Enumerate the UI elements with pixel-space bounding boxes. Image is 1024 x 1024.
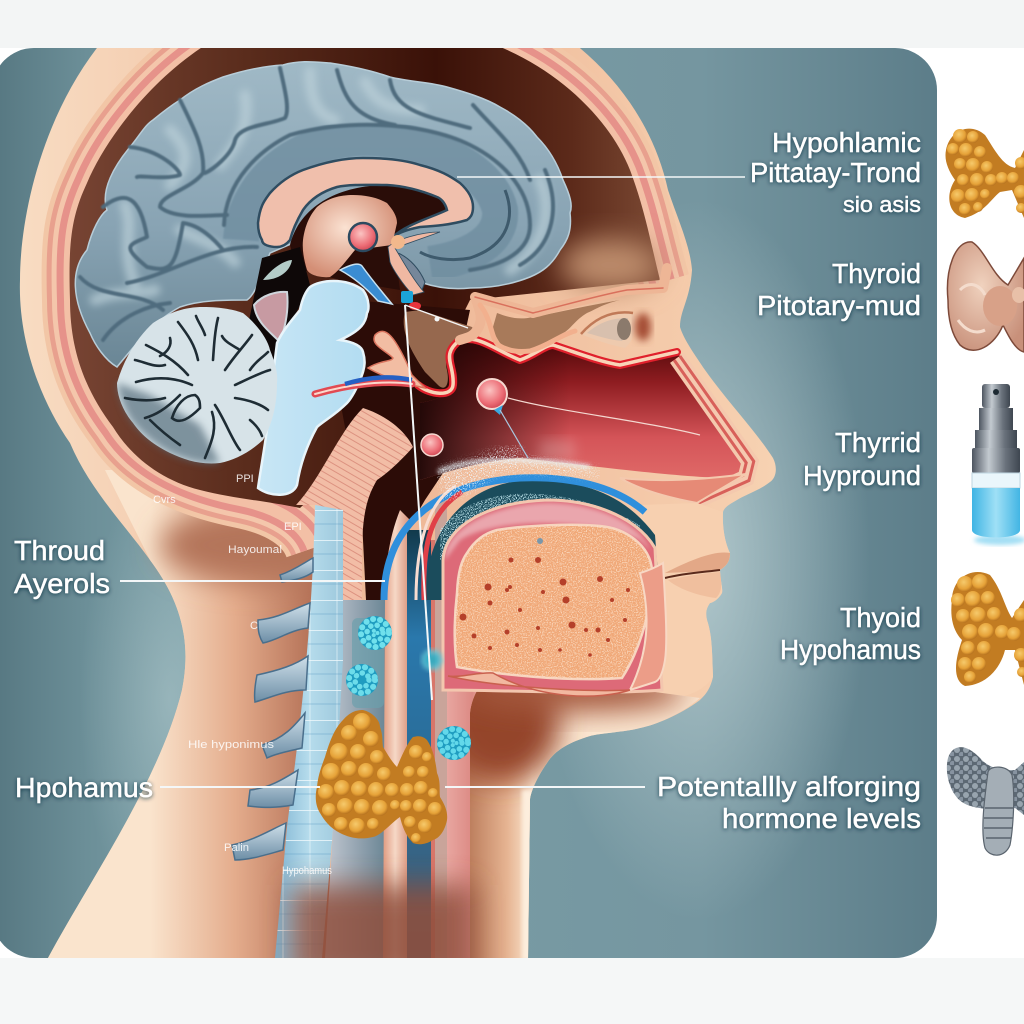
neck micro labels: C — [250, 620, 258, 632]
neck micro labels: Palin — [224, 842, 249, 854]
blue channel — [407, 530, 431, 960]
jaw and tongue assembly — [384, 478, 666, 696]
thyroid gland — [316, 710, 447, 844]
cerebellum lower shading — [117, 383, 220, 464]
label: thyroid pituitary — [757, 258, 921, 321]
blue tip under marker — [494, 405, 503, 415]
label: throud ayerols: Ayerols — [14, 568, 110, 599]
lavender band — [325, 600, 385, 958]
callosal rim — [420, 190, 509, 260]
icon: nasal spray bottle — [972, 384, 1024, 545]
icon: orange thyroid two — [951, 572, 1024, 686]
black gap beside brainstem — [245, 247, 310, 395]
pale throat tube — [383, 510, 410, 958]
neck micro labels: Hayoumal — [228, 544, 282, 556]
brain mass — [75, 62, 571, 367]
mist speckle — [437, 445, 600, 500]
tongue — [455, 525, 652, 679]
jaw lower band — [448, 673, 630, 696]
arbor vitae lines — [125, 316, 270, 458]
pituitary red marker — [409, 302, 421, 310]
hormone particle 4 — [437, 726, 471, 760]
highlight in cavity — [560, 239, 660, 291]
label: thyoid hypohamus — [780, 602, 921, 665]
jaw pink band — [443, 500, 662, 692]
label: thyoid hypohamus: Thyoid — [840, 602, 921, 633]
pink band speckle — [445, 503, 650, 560]
tongue spots — [460, 557, 630, 657]
neck shading — [48, 470, 330, 958]
blue hypothalamic band — [340, 264, 392, 304]
label: hypothalamic axis: Pittatay-Trond — [750, 157, 921, 188]
pink jaw wall — [447, 692, 476, 958]
pharynx dark — [340, 300, 470, 600]
neck micro labels: EPI — [284, 521, 302, 533]
label: potentially altering hormone levels: hormone levels — [722, 803, 921, 834]
label: thyroid pituitary: Thyroid — [832, 258, 921, 289]
red vessel — [424, 492, 462, 600]
label: thyoid hypohamus: Hypohamus — [780, 634, 921, 665]
vertebral processes — [232, 558, 313, 860]
pituitary blue marker — [401, 291, 413, 303]
neck micro labels: PPI — [236, 473, 254, 485]
hypothalamus marker — [349, 223, 377, 251]
nose cartilage band — [620, 358, 750, 503]
label: throud ayerols — [14, 535, 110, 599]
hormone particle 1 — [358, 616, 392, 650]
icon: pink thyroid — [947, 242, 1024, 352]
skull band — [70, 44, 662, 548]
thalamus — [303, 195, 397, 277]
label: throud ayerols: Throud — [14, 535, 105, 566]
head in profile — [20, 44, 776, 962]
label: hypothalamic axis — [750, 127, 921, 217]
spine grid — [275, 505, 343, 958]
mist arc — [438, 460, 590, 472]
upper lip shade — [665, 552, 730, 573]
sinus interior — [493, 300, 620, 350]
lower lip cartilage — [630, 563, 666, 690]
bottom strip — [0, 958, 1024, 1024]
neck micro labels — [153, 473, 332, 877]
pale vessel edge — [416, 486, 456, 600]
cerebellum — [117, 307, 277, 464]
red strip — [431, 540, 435, 960]
gyri highlights — [95, 72, 546, 300]
neck structures — [232, 500, 700, 960]
upper neck shadow — [160, 507, 350, 583]
sinus and palate outline — [418, 268, 677, 393]
teal panel behind particles — [352, 618, 384, 708]
label: thyrrid hypround — [803, 427, 921, 491]
small gland — [254, 292, 288, 342]
brain — [75, 62, 571, 367]
label: thyrrid hypround: Hypround — [803, 460, 921, 491]
label: potentially altering hormone levels: Potentallly alforging — [657, 771, 921, 802]
nasal marker small — [421, 434, 443, 456]
gyri sulci — [80, 68, 553, 340]
thyroid lumps — [318, 713, 442, 843]
icon: grey thyroid — [947, 747, 1024, 855]
dark teal zone — [425, 480, 660, 600]
label: hpohamus: Hpohamus — [15, 772, 153, 803]
pale wash — [540, 440, 575, 460]
tongue fine texture — [455, 525, 652, 679]
front of neck tissue — [470, 673, 700, 960]
skin silhouette — [20, 44, 776, 962]
tan nub — [391, 235, 405, 249]
dark space below callosum — [290, 185, 447, 290]
nose and throat tube — [315, 331, 425, 394]
teal speckle — [440, 494, 640, 560]
corpus callosum — [258, 158, 473, 247]
label: hypothalamic axis: Hypohlamic — [772, 127, 921, 158]
top strip — [0, 0, 1024, 48]
label: thyroid pituitary: Pitotary-mud — [757, 290, 921, 321]
label: potentially altering hormone levels — [657, 771, 921, 834]
eye — [581, 312, 651, 348]
blue dot — [537, 538, 543, 544]
small pale structure — [263, 260, 292, 280]
bottom fade — [290, 885, 475, 985]
brown tissue near sinus — [404, 310, 473, 388]
brown shading under jaw — [470, 692, 698, 958]
blue vessel — [384, 478, 645, 600]
leader lines — [120, 177, 745, 787]
nasal cavity — [420, 339, 757, 480]
cranial cavity — [70, 44, 660, 540]
neck micro labels: Cvrs — [153, 494, 176, 506]
lower lip shade — [668, 572, 721, 598]
grey wedge — [398, 253, 425, 290]
label: hypothalamic axis: sio asis — [843, 192, 921, 217]
spine column — [275, 505, 343, 958]
strip between vessels and jaw wall — [435, 500, 447, 906]
mouth line — [665, 570, 720, 578]
brainstem — [258, 281, 368, 495]
lips and lower face — [698, 504, 730, 676]
cingulate band — [241, 138, 500, 264]
pink laryngeal structure — [296, 408, 413, 600]
pituitary stalk — [388, 232, 440, 295]
label: thyrrid hypround: Thyrrid — [835, 427, 921, 458]
nasal marker large — [477, 379, 507, 409]
neck micro labels: Hypohamus — [282, 865, 332, 877]
hormone particle 3 — [423, 651, 441, 669]
icon: orange thyroid — [945, 129, 1024, 218]
hormone particle 2 — [346, 664, 378, 696]
nasal spray mist — [437, 440, 600, 500]
neck micro labels: Hle hyponimus — [188, 739, 275, 751]
